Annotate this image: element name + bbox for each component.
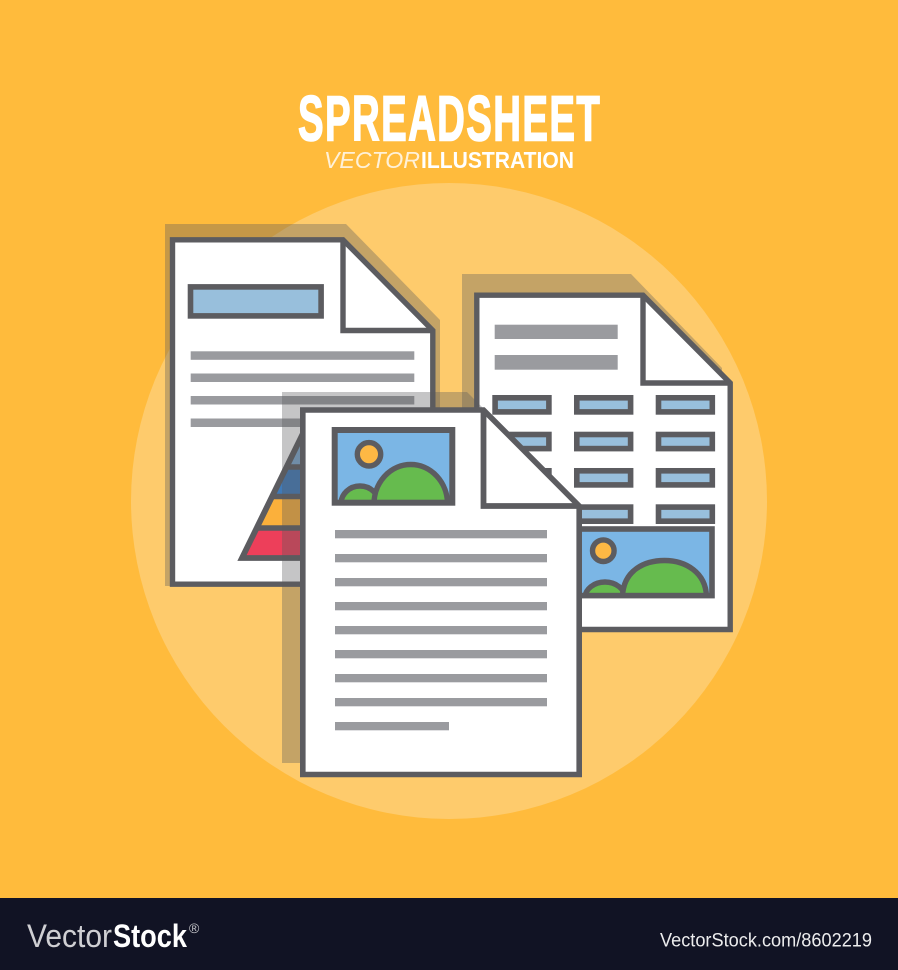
footer logo: Stock	[113, 918, 187, 954]
subheading: vector illustration: ILLUSTRATION	[421, 147, 574, 173]
text lines	[335, 530, 547, 730]
pyramid chart	[237, 433, 300, 561]
document: table page	[462, 274, 730, 632]
header box	[190, 287, 321, 316]
table cells	[495, 398, 712, 521]
title	[298, 84, 601, 173]
document: pyramid chart page	[165, 224, 440, 586]
footer logo: ®	[189, 920, 200, 936]
folded corner	[343, 240, 433, 330]
footer logo	[27, 918, 200, 954]
background circle	[131, 183, 767, 819]
footer bar	[0, 898, 898, 970]
picture	[335, 430, 452, 504]
picture	[570, 529, 712, 598]
footer logo: Vector	[27, 918, 112, 954]
page outline	[303, 410, 579, 774]
shadow of front page	[282, 392, 482, 763]
subheading: vector illustration	[324, 147, 574, 173]
shadow of table page	[462, 274, 722, 632]
shadow of pyramid page	[165, 224, 440, 586]
document: front image page	[303, 410, 579, 774]
folded corner	[484, 410, 579, 506]
page outline	[172, 240, 433, 584]
footer image id: VectorStock.com/8602219	[660, 930, 872, 952]
subheading: vector illustration: VECTOR	[324, 147, 420, 173]
heading: spreadsheet: SPREADSHEET	[298, 84, 601, 155]
page outline	[477, 295, 730, 630]
heading lines	[495, 325, 618, 370]
folded corner	[643, 295, 730, 383]
text lines	[191, 351, 414, 427]
